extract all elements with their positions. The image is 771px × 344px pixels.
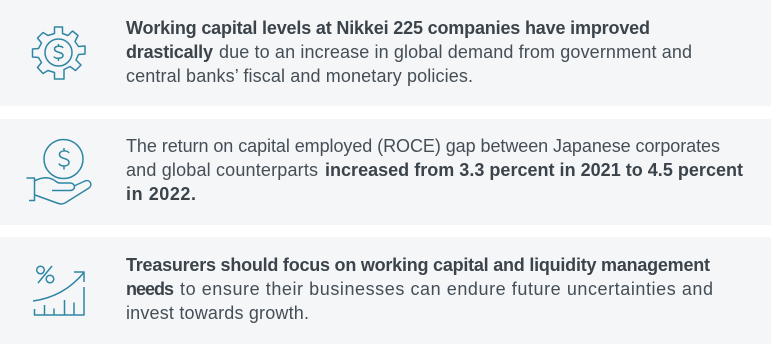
text: working capital: due to an increase in global demand from government and (219, 42, 692, 62)
text: return on capital employed: in 2022. (126, 184, 196, 204)
text: treasurers: to ensure their businesses can endure future uncertainties and (180, 279, 713, 299)
icon: hand with coin (26, 140, 91, 204)
text: treasurers: needs (126, 279, 174, 299)
text: working capital: Working capital levels at Nikkei 225 companies have improved (126, 18, 650, 38)
icon: gear with dollar (32, 27, 85, 79)
panel: working capital (0, 0, 771, 106)
text: treasurers: invest towards growth. (126, 303, 309, 323)
text: return on capital employed: and global counterparts (126, 160, 318, 180)
panel: treasurers (0, 237, 771, 344)
text: working capital: central banks’ fiscal and monetary policies. (126, 66, 473, 86)
text: return on capital employed: increased from 3.3 percent in 2021 to 4.5 percent (325, 160, 743, 180)
panel: return on capital employed (0, 119, 771, 225)
text: treasurers (126, 255, 713, 323)
text: return on capital employed: The return on capital employed (ROCE) gap between Japanese corporates (126, 136, 720, 156)
text: working capital (126, 18, 692, 86)
text: working capital: drastically (126, 42, 213, 62)
text: return on capital employed (126, 136, 743, 204)
icon: percent growth chart (33, 266, 84, 315)
text: treasurers: Treasurers should focus on working capital and liquidity management (126, 255, 710, 275)
